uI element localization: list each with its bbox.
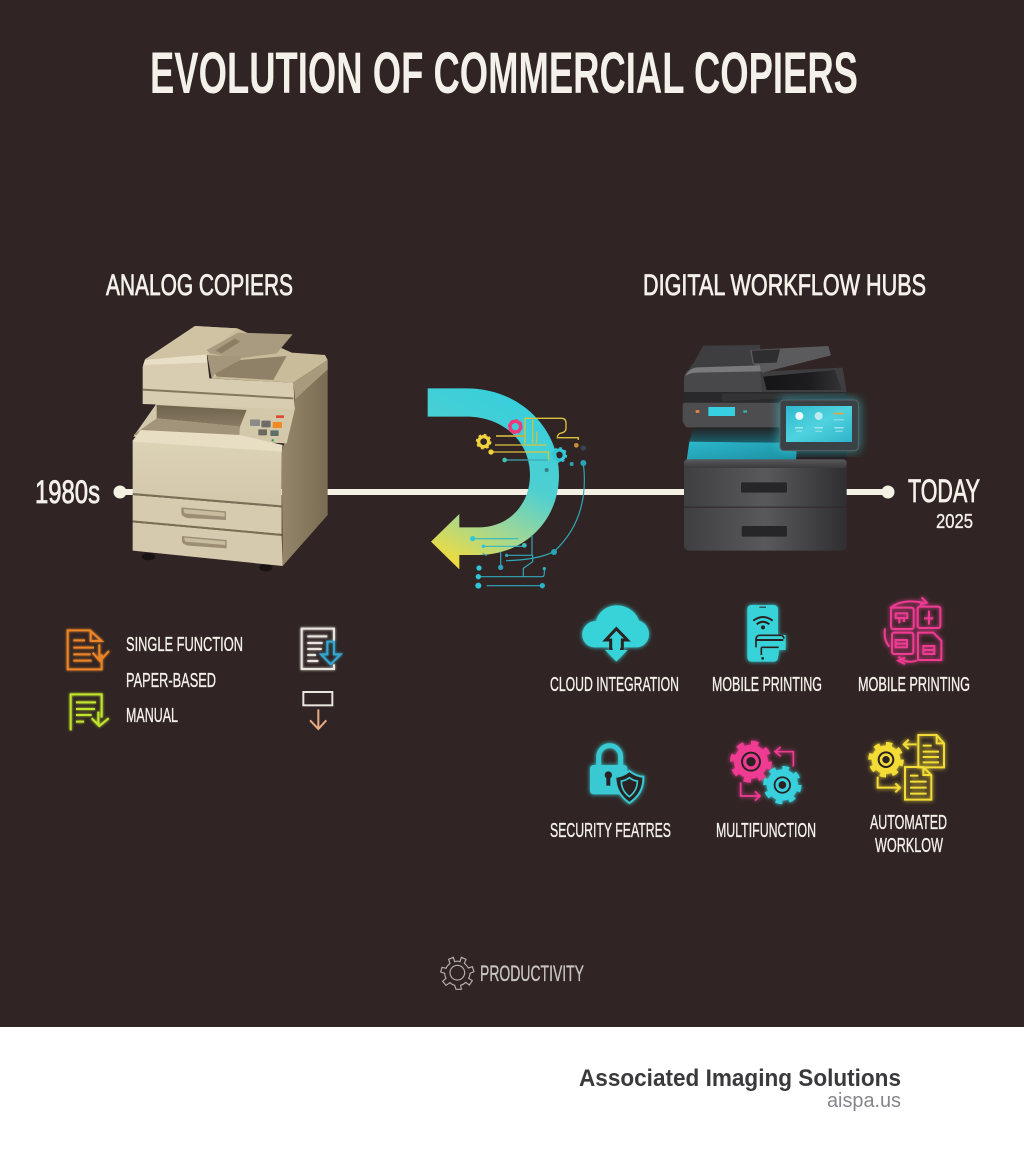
label: productivity: PRODUCTIVITY [480,961,584,986]
label: today: TODAY [908,473,980,509]
footer panel [0,1027,1024,1154]
icon: productivity gear [441,957,474,989]
timeline [114,486,894,498]
icon: multifunction gears [732,743,799,802]
icon: cloud integration [582,605,649,662]
circuit nodes [470,443,586,589]
lower circuit traces [473,535,544,586]
gear: pink [509,420,522,433]
illustration: digital workflow hub [683,345,860,551]
curved gradient arrow [428,388,559,569]
icon: orange document [68,630,109,669]
label: automated workflow: AUTOMATED [870,812,947,834]
text: single function: SINGLE FUNCTION [126,634,243,656]
icon: security lock and shield [590,746,643,803]
label: automated workflow: WORKLOW [875,835,943,857]
label: 2025: 2025 [936,511,973,533]
footer company name: Associated Imaging Solutions [579,1065,901,1092]
icon: lime document [71,694,109,730]
gear: cyan [553,448,566,462]
arrow: transition with circuit lines [428,388,586,589]
label: multifunction: MULTIFUNCTION [716,820,816,842]
icon: pink document grid [885,597,941,664]
illustration: analog copier [133,326,328,571]
icon: automated workflow [870,735,944,800]
label: cloud integration: CLOUD INTEGRATION [550,674,679,696]
icon: rectangle with arrow [303,692,332,729]
text: paper-based: PAPER-BASED [126,670,216,692]
heading: analog copiers: ANALOG COPIERS [106,269,293,302]
label: security features: SECURITY FEATRES [550,820,671,842]
label: 1980s: 1980s [35,474,100,510]
text: manual: MANUAL [126,705,178,727]
gear: yellow [477,435,490,448]
icon: white document with blue arrow [302,629,341,669]
footer url: aispa.us [827,1090,901,1112]
label: automated workflow [870,812,947,857]
icon: mobile printing phone [747,605,786,662]
upper circuit traces [491,418,584,561]
label: mobile printing: MOBILE PRINTING [712,674,822,696]
